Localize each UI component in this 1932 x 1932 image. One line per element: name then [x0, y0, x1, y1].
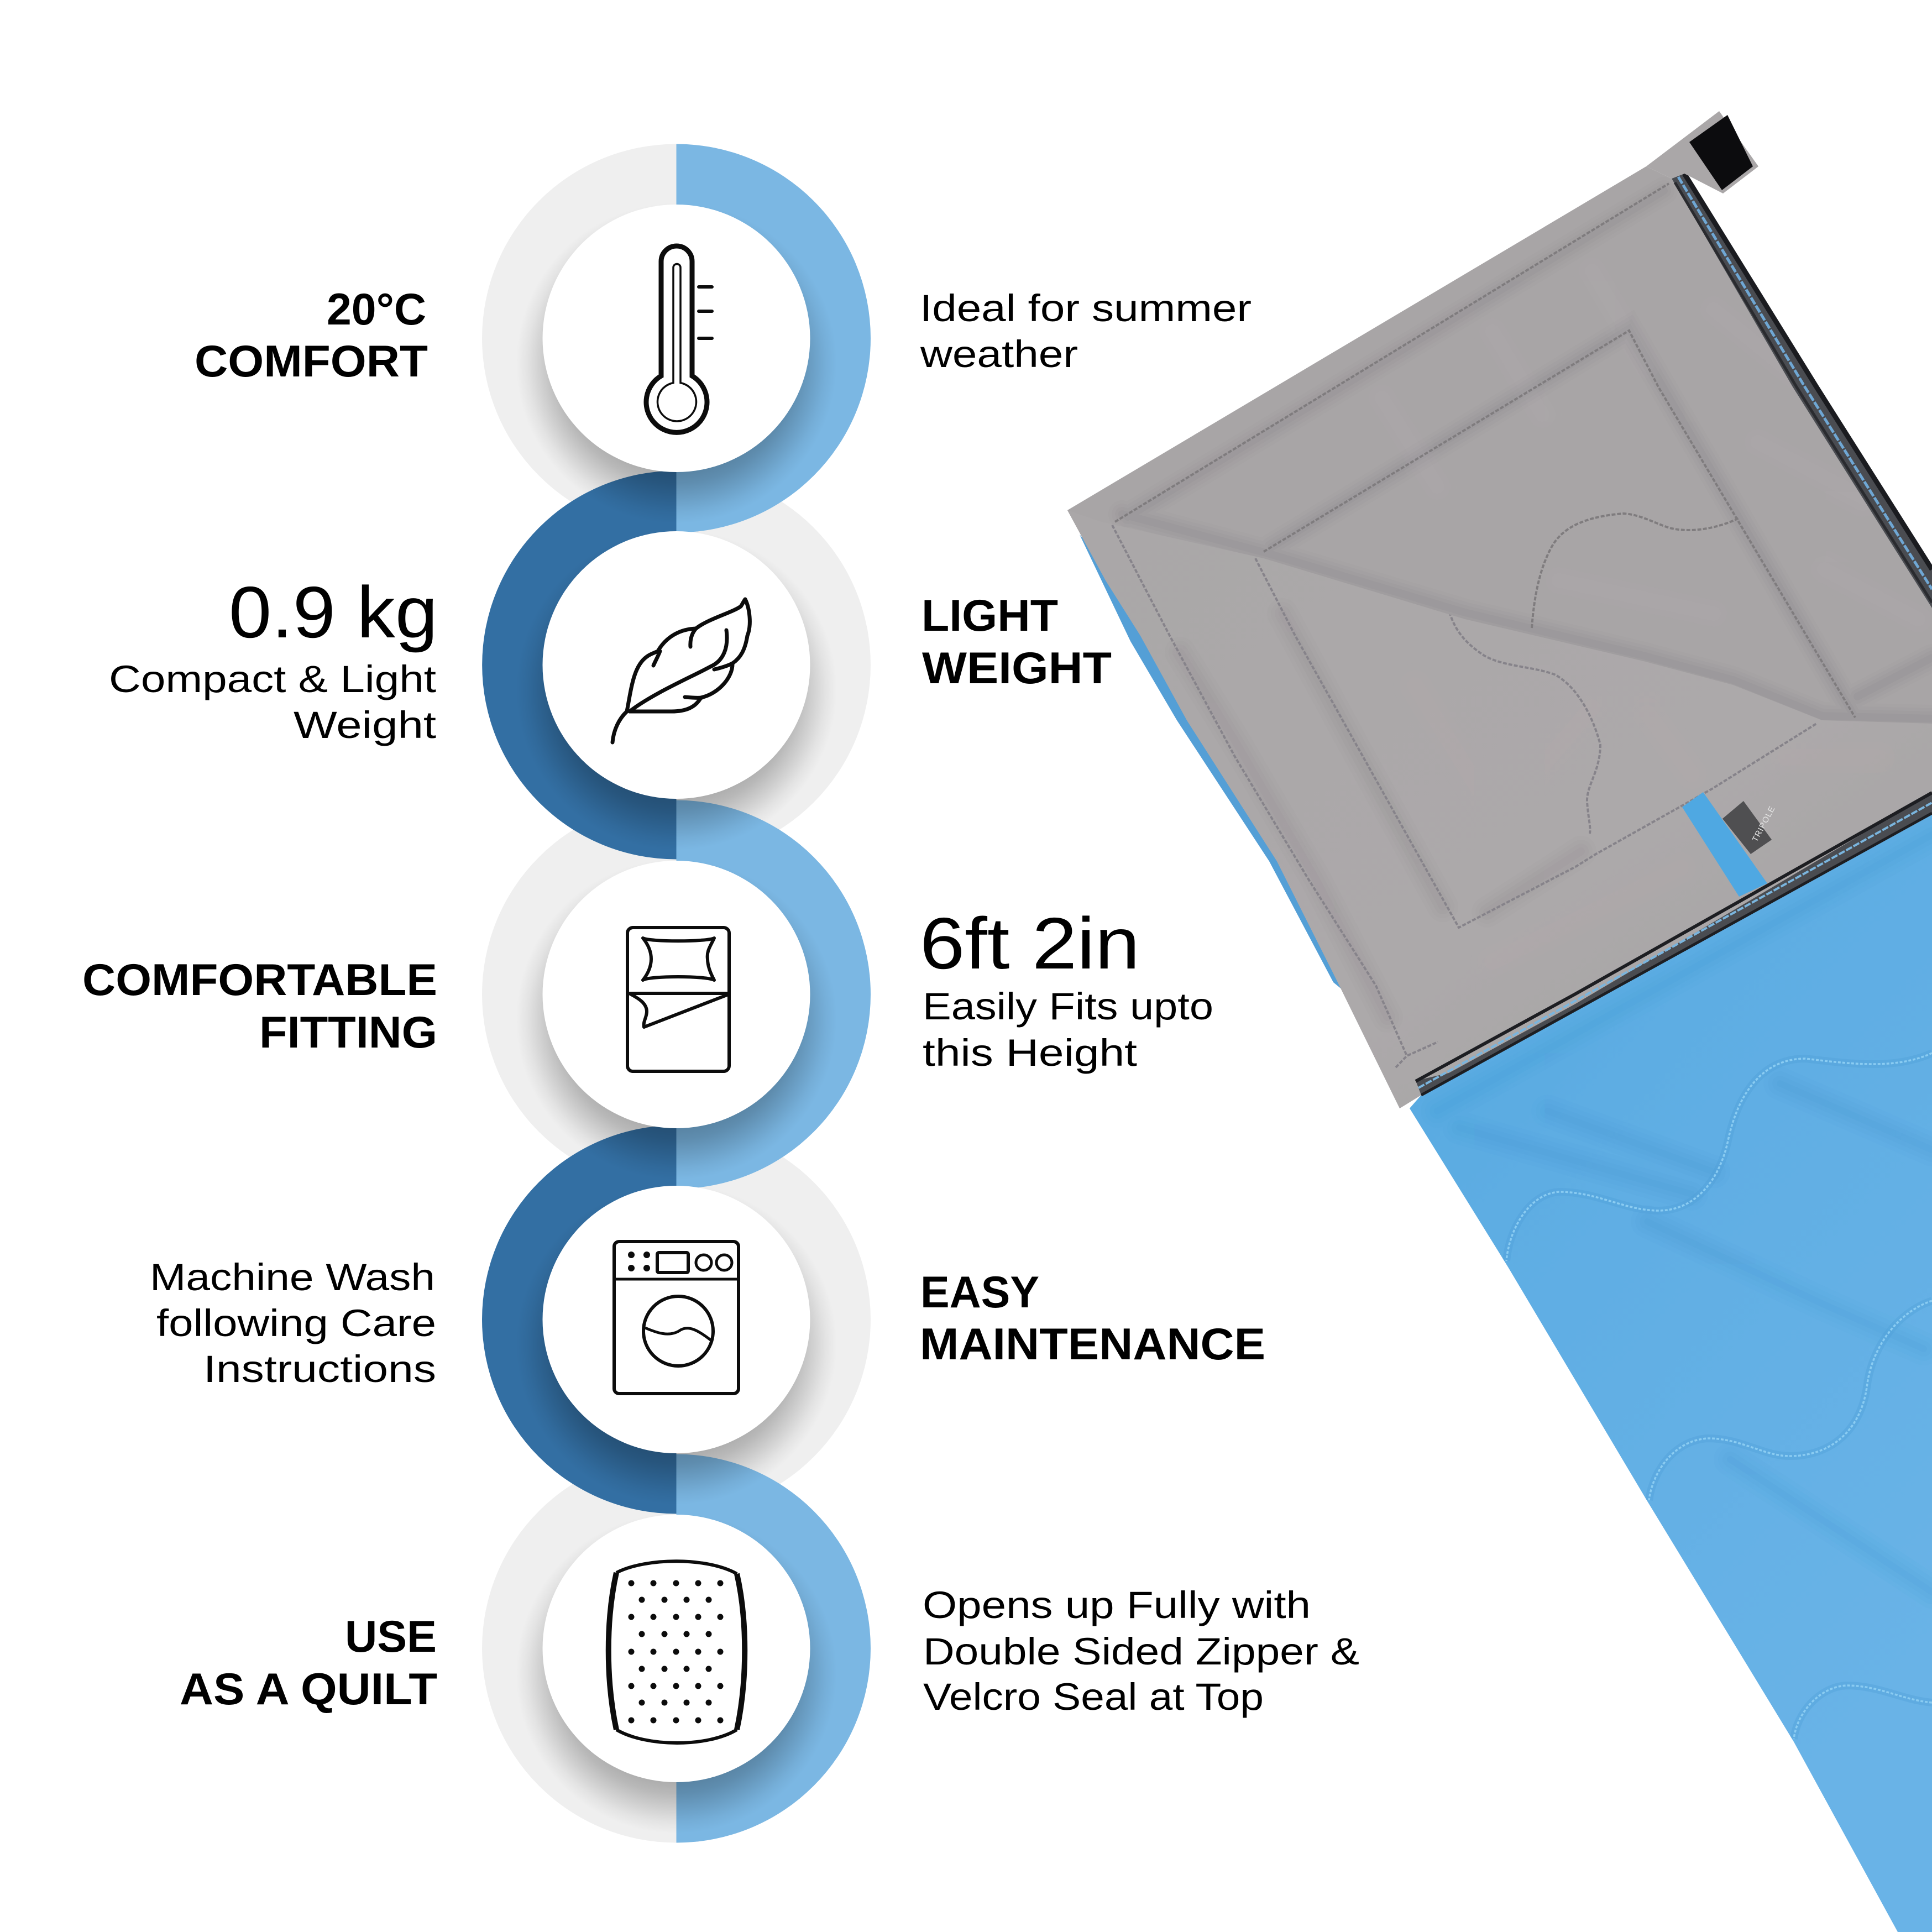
stat: 0.9 kg: Compact & Light	[109, 658, 436, 700]
icon: bed	[627, 928, 729, 1071]
stat: 0.9 kg	[109, 572, 438, 746]
white inner circles	[543, 205, 810, 1782]
flap stitching	[1112, 525, 1816, 1067]
stat: 6ft 2in: this Height	[923, 1032, 1137, 1074]
coloured ring halves	[482, 144, 871, 1843]
stat: 6ft 2in: Easily Fits upto	[923, 985, 1213, 1028]
feature ring column	[482, 144, 871, 1843]
heading: 20°C comfort: 20°C	[327, 285, 426, 334]
back layer stitching	[1115, 184, 1855, 718]
icon: thermometer	[646, 246, 712, 432]
heading: use as a quilt	[180, 1612, 437, 1714]
heading: use as a quilt: AS A QUILT	[180, 1664, 437, 1714]
text: machine wash	[150, 1256, 436, 1390]
text: ideal for summer	[920, 287, 1252, 375]
text: machine wash: Machine Wash	[150, 1256, 435, 1299]
icon: quilt with dots	[609, 1561, 745, 1743]
stat: 6ft 2in: 6ft 2in	[920, 903, 1140, 984]
inner circle shadows	[516, 203, 837, 1834]
text: machine wash: following Care	[156, 1302, 436, 1344]
icon: feather	[612, 599, 750, 742]
grey inner lining, back layer	[1067, 166, 1932, 1108]
heading: easy maintenance: MAINTENANCE	[920, 1320, 1265, 1369]
quilting stitches on the blue shell	[1506, 1053, 1932, 1739]
stat: 6ft 2in	[920, 903, 1213, 1074]
heading: light weight: WEIGHT	[922, 643, 1112, 693]
text: opens up fully: Double Sided Zipper &	[923, 1630, 1359, 1673]
text: opens up fully: Opens up Fully with	[923, 1584, 1311, 1626]
velcro tab	[1646, 111, 1758, 193]
heading: light weight: LIGHT	[922, 591, 1058, 641]
text: machine wash: Instructions	[203, 1348, 436, 1390]
text: opens up fully: Velcro Seal at Top	[923, 1676, 1264, 1718]
blue tab and logo label	[1682, 792, 1777, 897]
stat: 0.9 kg: 0.9 kg	[229, 572, 438, 653]
text: ideal for summer: Ideal for summer	[920, 287, 1252, 329]
photo: sleeping bag	[1067, 111, 1932, 1932]
grey ring halves	[482, 144, 871, 1843]
heading: comfortable fitting	[82, 955, 437, 1057]
grey inner lining, folded front flap	[1067, 510, 1932, 1108]
heading: comfortable fitting: FITTING	[259, 1008, 437, 1057]
lower zipper strip	[1416, 793, 1932, 1095]
text: ideal for summer: weather	[920, 333, 1078, 375]
text: opens up fully	[923, 1584, 1359, 1718]
icon: washing machine	[614, 1242, 739, 1394]
heading: comfortable fitting: COMFORTABLE	[82, 955, 437, 1005]
heading: easy maintenance	[920, 1268, 1265, 1369]
heading: use as a quilt: USE	[345, 1612, 437, 1662]
blue outer shell of the bag	[1080, 535, 1932, 1932]
upper zipper strip	[1672, 174, 1932, 608]
heading: 20°C comfort: COMFORT	[195, 337, 428, 386]
heading: 20°C comfort	[195, 285, 428, 386]
blue tab and logo label: TRIPOLE	[1751, 804, 1777, 844]
heading: light weight	[922, 591, 1112, 693]
heading: easy maintenance: EASY	[920, 1268, 1039, 1317]
stat: 0.9 kg: Weight	[294, 704, 436, 746]
